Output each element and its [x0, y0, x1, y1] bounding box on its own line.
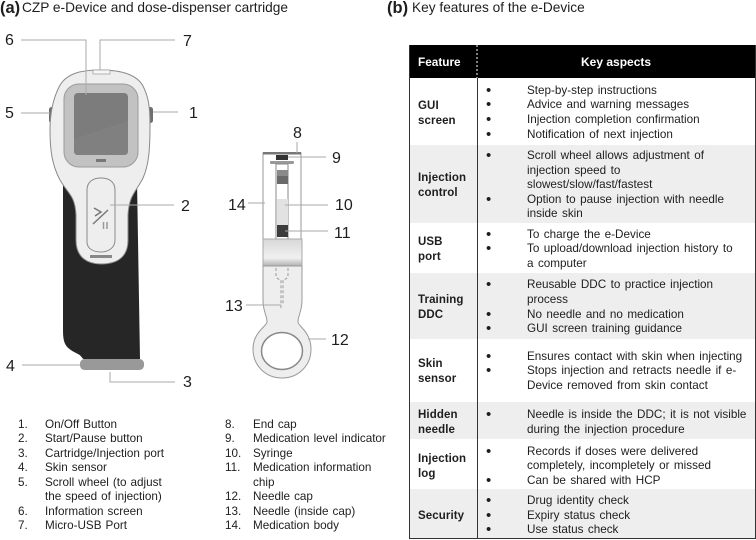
row: Security: • [486, 492, 491, 509]
row: GUI screen: screen [418, 115, 456, 127]
row: Injection log [418, 443, 711, 489]
row: GUI screen [418, 82, 700, 143]
legend: device parts: Scroll wheel (to adjust [45, 476, 162, 489]
row: Training DDC [418, 276, 713, 337]
row: Hidden needle: Needle is inside the DDC; it is not visible [527, 408, 746, 421]
legend: cartridge parts [225, 418, 386, 532]
row: USB port: To upload/download injection history to [527, 242, 733, 255]
callouts: cartridge numbers: 10 [335, 197, 353, 214]
table header: Feature [418, 55, 461, 69]
legend: cartridge parts: 9. [225, 432, 235, 445]
device head [50, 70, 150, 264]
row: Hidden needle: Hidden [418, 409, 458, 421]
table borders [410, 45, 756, 538]
row: GUI screen: • [486, 82, 491, 99]
row: GUI screen: • [486, 126, 491, 143]
medication level indicator [276, 155, 288, 160]
row: Injection log: log [418, 468, 436, 480]
row: Training DDC: • [486, 320, 491, 337]
row: GUI screen: • [486, 111, 491, 128]
legend: cartridge parts: chip [253, 476, 275, 489]
row: GUI screen: GUI [418, 100, 439, 112]
row: Hidden needle: • [486, 406, 491, 423]
row: Injection control: Injection [418, 172, 466, 184]
row: Training DDC: • [486, 276, 491, 293]
legend: device parts: On/Off Button [45, 418, 117, 431]
legend: device parts: 3. [18, 447, 28, 460]
row: USB port: • [486, 226, 491, 243]
syringe flange [270, 161, 294, 164]
row: Skin sensor: sensor [418, 373, 457, 385]
callouts: device numbers: 5 [5, 105, 14, 122]
row: USB port [418, 226, 733, 270]
legend: device parts: Cartridge/Injection port [45, 447, 165, 460]
row: GUI screen: Injection completion confirmation [527, 113, 700, 126]
device text mark [90, 255, 112, 258]
callouts: device numbers: 2 [181, 198, 190, 215]
row: Security: Expiry status check [527, 509, 630, 522]
row: Security: Drug identity check [527, 494, 629, 507]
legend: cartridge parts: Syringe [253, 447, 293, 460]
row: Training DDC: process [527, 293, 568, 306]
callouts: cartridge numbers: 9 [332, 150, 341, 167]
row: Injection log: Can be shared with HCP [527, 474, 661, 487]
row: Skin sensor: Skin [418, 358, 443, 370]
end cap [263, 152, 301, 154]
needle [276, 268, 288, 308]
legend: cartridge parts: 14. [225, 519, 241, 532]
legend: device parts: 7. [18, 519, 28, 532]
row: Injection control: slowest/slow/fast/fastest [527, 178, 653, 191]
row: Skin sensor: Device removed from skin contact [527, 379, 709, 392]
row: Security: • [486, 521, 491, 538]
callouts: cartridge numbers [225, 125, 353, 349]
row: Injection control: • [486, 191, 491, 208]
heading: panel b: Key features of the e-Device [412, 0, 585, 15]
row: Skin sensor: • [486, 348, 491, 365]
legend: device parts: Skin sensor [45, 461, 107, 474]
callouts: device numbers: 7 [183, 33, 192, 50]
row: Training DDC: Training [418, 294, 464, 306]
row: Injection log: completely, incompletely or missed [527, 459, 711, 472]
legend: cartridge parts: Medication information [253, 461, 371, 474]
callouts: device numbers: 4 [6, 358, 15, 375]
legend: device parts [18, 418, 165, 532]
legend: cartridge parts: Medication body [253, 519, 339, 532]
callouts: cartridge numbers: 11 [334, 225, 351, 242]
legend: cartridge parts: 13. [225, 505, 241, 518]
row: Injection control: injection speed to [527, 164, 621, 177]
legend: cartridge parts: Needle (inside cap) [253, 505, 355, 518]
legend: device parts: the speed of injection) [45, 490, 162, 503]
callouts: cartridge numbers: 12 [331, 332, 349, 349]
legend: device parts: 4. [18, 461, 28, 474]
legend: cartridge parts: Medication level indicator [253, 432, 386, 445]
callouts: cartridge numbers: 14 [228, 197, 246, 214]
row: Injection control [418, 147, 724, 220]
callouts: device numbers [5, 32, 198, 391]
row: Injection control: control [418, 187, 458, 199]
syringe [276, 164, 288, 239]
legend: device parts: 5. [18, 476, 28, 489]
row: Skin sensor: Ensures contact with skin when injecting [527, 350, 742, 363]
start/pause button [87, 178, 115, 252]
illustration: e-Device [49, 70, 153, 370]
illustration: dose-dispenser cartridge [253, 152, 311, 378]
row: Injection control: inside skin [527, 207, 583, 220]
legend: cartridge parts: 12. [225, 490, 241, 503]
medication information chip [277, 225, 288, 237]
row: Skin sensor [418, 348, 742, 392]
row: Skin sensor: Stops injection and retracts needle if e- [527, 364, 736, 377]
row: Training DDC: No needle and no medication [527, 308, 684, 321]
legend: device parts: 1. [18, 418, 28, 431]
row: Hidden needle: needle [418, 424, 455, 436]
row: USB port: • [486, 240, 491, 257]
row: Hidden needle [418, 406, 746, 436]
callouts: device numbers: 3 [183, 374, 192, 391]
medication body [263, 153, 301, 240]
legend: device parts: Information screen [45, 505, 143, 518]
legend: cartridge parts: 8. [225, 418, 235, 431]
row: Training DDC: GUI screen training guidance [527, 322, 682, 335]
table: key features [409, 45, 756, 538]
cartridge / injection port [80, 359, 144, 370]
row: USB port: a computer [527, 257, 587, 270]
row: Injection control: Scroll wheel allows adjustment of [527, 149, 705, 162]
side buttons [49, 107, 153, 123]
row: USB port: port [418, 251, 441, 263]
row: Security: Security [418, 510, 465, 522]
table header: Key aspects [581, 55, 651, 69]
row: Injection log: • [486, 472, 491, 489]
callouts: cartridge numbers: 13 [225, 298, 243, 315]
row: Security: • [486, 507, 491, 524]
micro-USB port [93, 70, 110, 74]
row: Injection log: Records if doses were delivered [527, 445, 698, 458]
row: Injection control: • [486, 147, 491, 164]
row: Injection log: Injection [418, 453, 466, 465]
shaded rows [409, 145, 755, 538]
callouts: device numbers: 1 [189, 105, 198, 122]
legend: cartridge parts: 10. [225, 447, 241, 460]
legend: cartridge parts: Needle cap [253, 490, 313, 503]
heading: panel a: CZP e-Device and dose-dispenser cartridge [22, 0, 288, 15]
table header [409, 45, 755, 78]
row: Skin sensor: • [486, 362, 491, 379]
screen bezel [64, 84, 138, 167]
row: GUI screen: • [486, 96, 491, 113]
row: GUI screen: Step-by-step instructions [527, 84, 657, 97]
information screen [74, 93, 128, 155]
row: Training DDC: Reusable DDC to practice injection [527, 278, 713, 291]
row: GUI screen: Notification of next injection [527, 128, 673, 141]
legend: device parts: Micro-USB Port [45, 519, 128, 532]
row: Security [418, 492, 630, 538]
needle cap [253, 266, 311, 378]
legend: cartridge parts: End cap [253, 418, 297, 431]
row: Training DDC: DDC [418, 309, 443, 321]
legend: device parts: Start/Pause button [45, 432, 143, 445]
row: GUI screen: Advice and warning messages [527, 98, 689, 111]
callouts: device numbers: 6 [5, 32, 14, 49]
row: Injection control: Option to pause injection with needle [527, 193, 724, 206]
callouts: cartridge numbers: 8 [293, 125, 302, 142]
row: Security: Use status check [527, 523, 619, 536]
row: USB port: To charge the e-Device [527, 228, 651, 241]
row: Hidden needle: during the injection procedure [527, 423, 685, 436]
logo [96, 159, 106, 162]
row: USB port: USB [418, 236, 443, 248]
legend: device parts: 2. [18, 432, 28, 445]
legend: cartridge parts: 11. [225, 461, 240, 474]
row: Injection log: • [486, 443, 491, 460]
device dark body [63, 180, 140, 359]
legend: device parts: 6. [18, 505, 28, 518]
row: Training DDC: • [486, 306, 491, 323]
